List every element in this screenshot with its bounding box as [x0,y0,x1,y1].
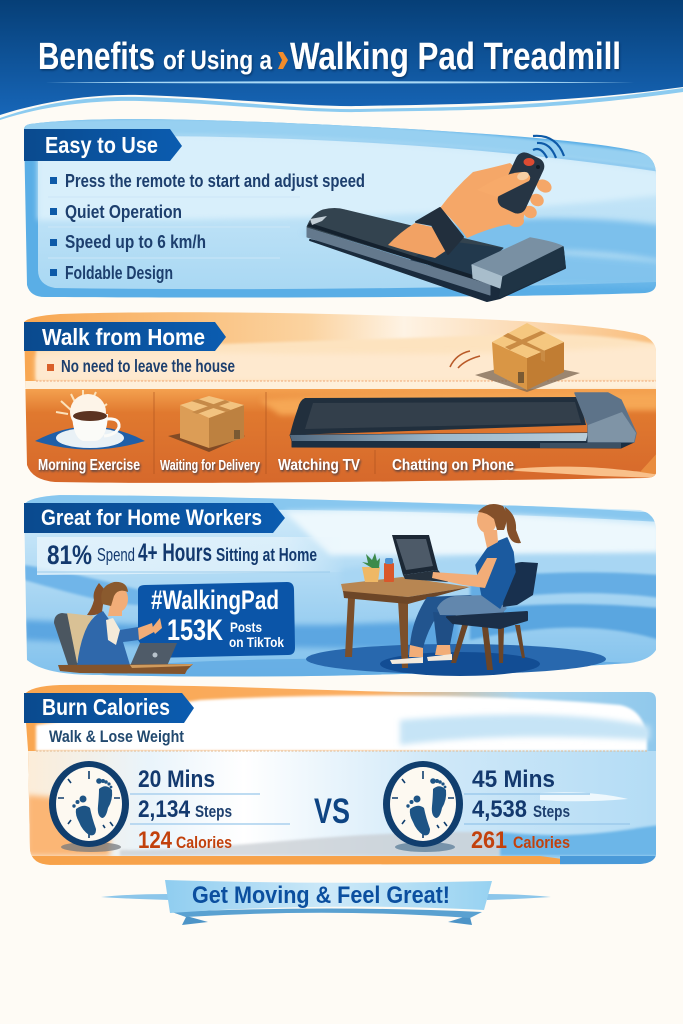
stat: 81% sitting at home: 4+ Hours [138,539,212,567]
banner: Get Moving & Feel Great! [101,880,551,925]
icon: coffee cup [35,390,145,450]
callout: #WalkingPad 153K posts: 153K [167,614,223,647]
stats: 45 minute walk: Calories [513,833,570,852]
ribbon: Easy to Use: Easy to Use [45,132,158,158]
water bottle [384,558,394,582]
labels: home activities: Waiting for Delivery [160,457,260,474]
arm [388,223,447,258]
stats: 20 minute walk [130,766,290,854]
banner: Get Moving & Feel Great!: Get Moving & Feel Great! [192,882,450,909]
subtitle: Walk & Lose Weight: Walk & Lose Weight [49,728,184,746]
icon: delivery box [168,396,245,452]
labels: home activities [38,457,514,474]
ribbon: Easy to Use [24,129,182,161]
title [38,36,621,78]
callout: #WalkingPad 153K posts: Posts [230,619,262,635]
stat: 81% sitting at home: 81% [47,540,92,570]
callout: #WalkingPad 153K posts: #WalkingPad [151,585,279,615]
stats: 20 minute walk: Steps [195,802,232,821]
panel: Burn Calories [20,680,660,870]
stats: 45 minute walk: Steps [533,802,570,821]
ribbon: Burn Calories: Burn Calories [42,694,170,720]
list: Easy to Use features: Press the remote to start and adjust speed [65,171,365,191]
stats: 45 minute walk: 261 [471,827,507,854]
illustration: flat walking pad [290,393,636,448]
laptop [392,535,448,582]
panel: Walk from Home [20,308,660,484]
stats: 20 minute walk: 2,134 [138,796,191,823]
stat: 81% sitting at home [37,537,345,575]
labels: home activities: Watching TV [278,457,360,474]
list: Easy to Use features [48,171,365,283]
icon: clock with footprints, 20 mins [49,761,129,852]
illustration: woman working at desk [306,504,606,676]
stats: 20 minute walk: 20 Mins [138,766,215,793]
icon: delivery box with motion lines [450,323,580,392]
illustration: woman on laptop at low desk [54,582,193,674]
illustration: walking pad with hand and remote [307,136,565,301]
panel: Easy to Use [20,110,660,305]
title: of Using a [163,45,273,75]
title: Benefits [38,36,155,78]
header banner [0,0,683,120]
stats: 45 minute walk: 45 Mins [472,766,555,793]
labels: home activities: Morning Exercise [38,457,140,474]
plant pot [362,553,380,582]
hand [440,163,554,238]
stats: 20 minute walk: Calories [176,833,232,852]
VS label: VS [314,792,350,831]
list: Easy to Use features: Speed up to 6 km/h [65,232,206,252]
list: Easy to Use features: Foldable Design [65,263,173,283]
title: Walking Pad Treadmill [290,36,621,78]
stat: 81% sitting at home: Spend [97,545,135,565]
stat: 81% sitting at home: Sitting at Home [216,545,317,565]
panel: Great for Home Workers [24,495,656,676]
list: Easy to Use features: Quiet Operation [65,202,182,222]
bullet: No need to leave the house: No need to leave the house [61,356,235,376]
stats: 45 minute walk [464,766,630,854]
icon: clock with footprints, 45 mins [383,761,463,852]
callout: #WalkingPad 153K posts: on TikTok [229,634,284,650]
remote [495,149,547,217]
stats: 45 minute walk: 4,538 [472,796,527,823]
stats: 20 minute walk: 124 [138,827,173,854]
ribbon: Great for Home Workers: Great for Home Workers [41,505,262,530]
callout: #WalkingPad 153K posts [138,582,295,658]
ribbon: Walk from Home: Walk from Home [42,324,205,350]
labels: home activities: Chatting on Phone [392,457,514,474]
title chevron [278,52,288,69]
